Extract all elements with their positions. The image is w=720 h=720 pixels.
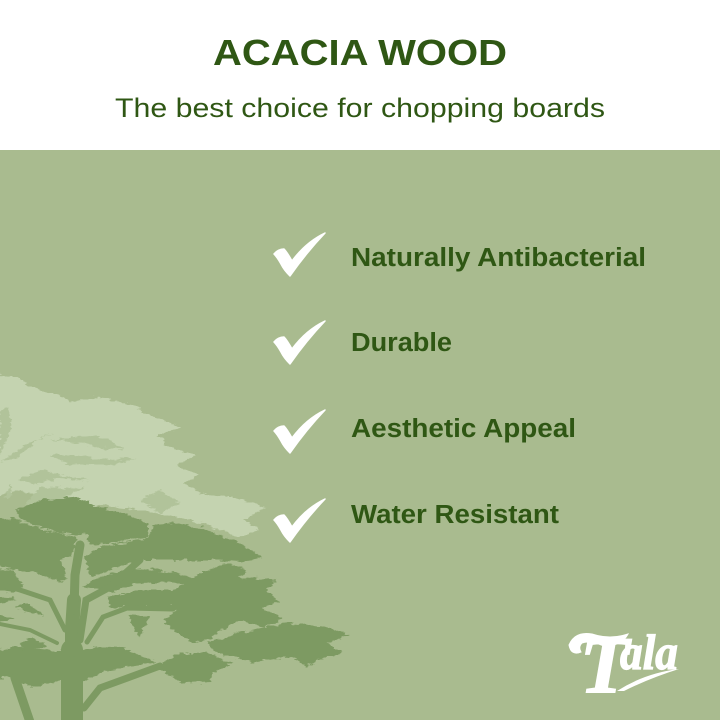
item: Naturally Antibacterial (274, 233, 646, 276)
checklist (274, 233, 646, 542)
illustration: dark foreground tree (0, 497, 350, 720)
panel: header (0, 0, 720, 150)
item: Aesthetic Appeal: Aesthetic Appeal (351, 415, 576, 443)
logo: Tala (569, 622, 679, 710)
item: Aesthetic Appeal (274, 410, 576, 453)
logo: Tala: T (580, 622, 632, 710)
item: Naturally Antibacterial: Naturally Antibacterial (351, 244, 646, 272)
item: Durable: Durable (351, 329, 452, 357)
tree trunk and branches (0, 545, 173, 720)
item: Durable (274, 321, 452, 364)
icon: check mark (274, 233, 325, 276)
icon: check mark (274, 321, 325, 364)
icon: check mark (274, 410, 325, 453)
title: ACACIA WOOD (213, 32, 507, 73)
subtitle: The best choice for chopping boards (115, 93, 605, 123)
item: Water Resistant (274, 499, 560, 542)
item: Water Resistant: Water Resistant (351, 501, 560, 529)
panel: green background (0, 150, 720, 720)
illustration: light background tree (0, 373, 267, 537)
logo: Tala: ala (620, 624, 678, 680)
icon: check mark (274, 499, 325, 542)
tree canopies (0, 497, 350, 688)
